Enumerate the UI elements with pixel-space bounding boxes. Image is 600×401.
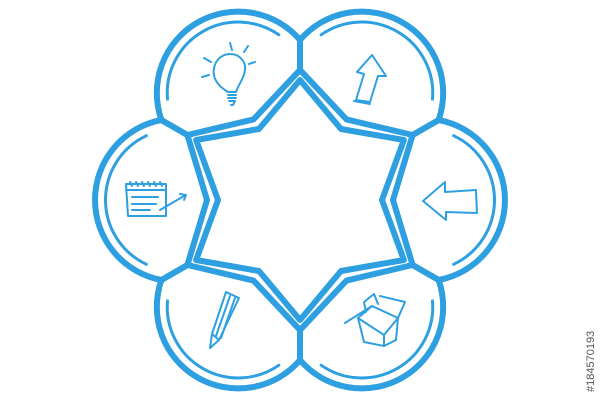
star (196, 80, 404, 320)
icon: pencil (210, 292, 239, 348)
text: image id: #184570193 (585, 331, 597, 392)
petals (95, 0, 505, 401)
icon: left arrow (423, 182, 477, 220)
icon: notepad (126, 182, 186, 216)
icon: lightbulb (202, 43, 255, 105)
icon: up arrow (354, 55, 386, 104)
icon: open box (345, 294, 405, 346)
